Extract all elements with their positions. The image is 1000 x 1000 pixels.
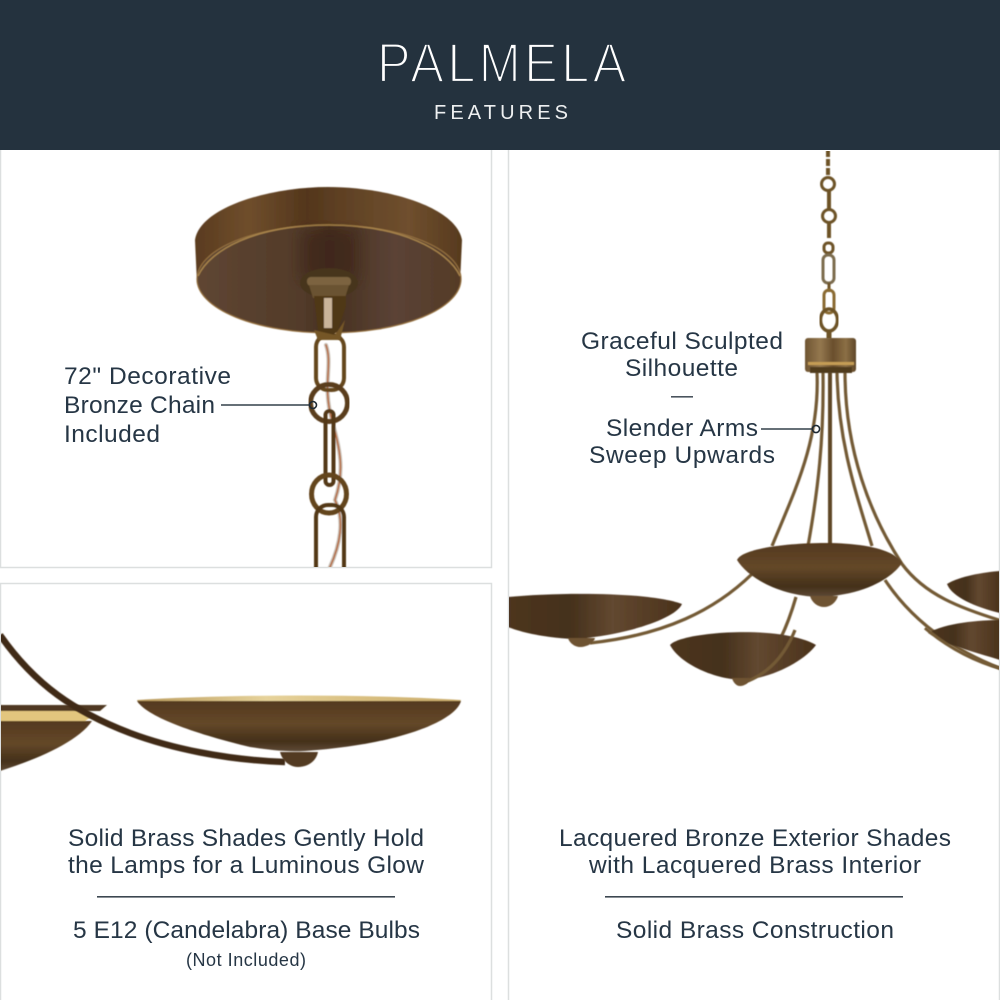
text: slender arms: Sweep Upwards bbox=[589, 442, 775, 469]
icon: curved arm bbox=[0, 635, 285, 762]
title: PALMELA bbox=[377, 33, 627, 95]
text: silhouette heading: Silhouette bbox=[625, 355, 738, 382]
text: shade features: the Lamps for a Luminous Glow bbox=[68, 852, 424, 879]
callout line: arms bbox=[761, 425, 820, 433]
icon: large bronze shade bbox=[137, 696, 461, 767]
panel: solid brass shades bbox=[0, 635, 461, 970]
text: shade features: Solid Brass Shades Gently Hold bbox=[68, 825, 424, 852]
text: exterior features: with Lacquered Brass Interior bbox=[588, 852, 921, 879]
header banner bbox=[0, 0, 1000, 150]
icon: right shades bbox=[925, 571, 1000, 669]
text: chain label: 72" Decorative bbox=[64, 363, 231, 390]
text: chain label bbox=[65, 366, 230, 442]
panel: chandelier overview bbox=[508, 150, 1000, 944]
text: chain label: Bronze Chain bbox=[64, 392, 215, 419]
icon: chain bbox=[820, 150, 838, 339]
text: exterior features: Lacquered Bronze Exterior Shades bbox=[559, 825, 951, 852]
icon: ceiling canopy bbox=[195, 187, 462, 340]
text: shade features: 5 E12 (Candelabra) Base Bulbs bbox=[73, 917, 420, 944]
icon: center shade bbox=[737, 543, 902, 607]
callout line: chain bbox=[221, 402, 316, 408]
text: shade features: (Not Included) bbox=[186, 950, 306, 970]
text: exterior features bbox=[559, 825, 951, 944]
text: shade features bbox=[68, 825, 424, 970]
text: silhouette heading: Graceful Sculpted bbox=[581, 328, 783, 355]
icon: lower shade bbox=[670, 630, 816, 686]
icon: left partial shade bbox=[0, 705, 107, 771]
text: slender arms: Slender Arms bbox=[606, 415, 758, 442]
text: silhouette heading bbox=[582, 332, 782, 376]
icon: bronze chain bbox=[310, 335, 348, 580]
panel: canopy and chain bbox=[64, 187, 462, 580]
text: chain label: Included bbox=[64, 421, 160, 448]
divider bbox=[671, 396, 693, 398]
text: slender arms bbox=[589, 415, 775, 469]
subtitle: FEATURES bbox=[434, 102, 568, 124]
icon: left shade bbox=[508, 594, 682, 647]
icon: arms bbox=[590, 372, 1000, 682]
text: exterior features: Solid Brass Construction bbox=[616, 917, 894, 944]
icon: collar bbox=[805, 338, 856, 373]
